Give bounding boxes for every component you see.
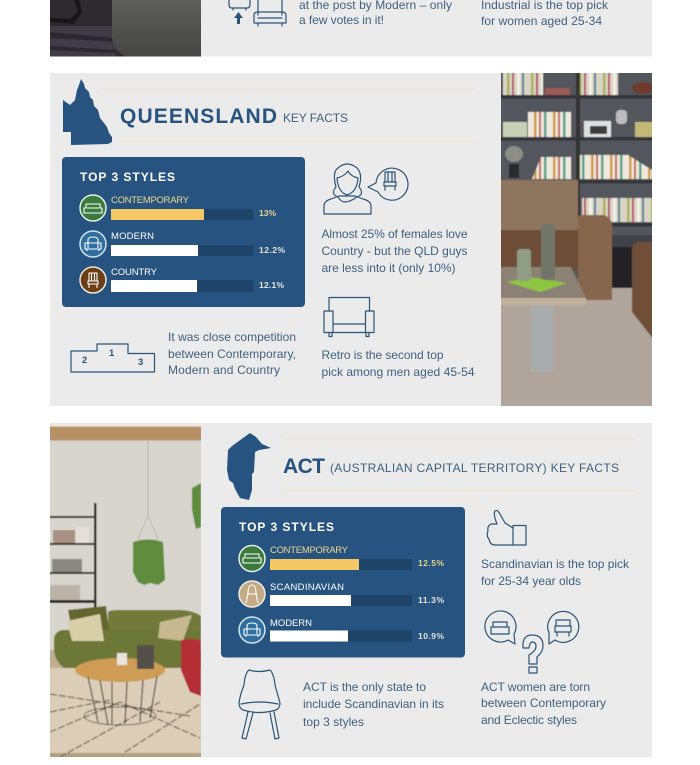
text: modern fact [299,0,452,27]
bar: Modern 10.9% [239,617,444,643]
panel: top 3 styles, Queensland: TOP 3 STYLES [80,170,175,184]
icon: Queensland map [63,79,112,145]
text: Scandinavian top pick: for 25-34 year olds [481,574,581,588]
text: close competition: Modern and Country [168,363,280,377]
text: females love Country: are less into it (only 10%) [322,261,456,275]
text: ACT women torn: ACT women are torn [481,680,590,694]
panel: Australian Capital Territory [44,417,652,763]
text: only state with Scandinavian: top 3 styles [303,715,364,729]
icon: retro armchair [324,298,374,336]
bar: Modern 10.9%: 10.9% [418,631,444,641]
text: Scandinavian top pick [481,557,630,588]
text: close competition [168,330,296,377]
icon: Scandinavian chair [239,670,280,739]
bar: Contemporary 13% [80,195,276,221]
bar: Modern 12.2% [80,231,285,257]
bar: Contemporary 12.5% [239,545,444,572]
bar: Scandinavian 11.3%: 11.3% [418,595,444,605]
bar: Contemporary 13%: 13% [259,208,276,218]
text: ACT women torn: and Eclectic styles [481,713,577,727]
panel: Queensland [50,67,658,412]
icon: ACT map [227,433,271,500]
panel: top 3 styles, ACT: TOP 3 STYLES [239,520,334,534]
icon: chairs with upward arrow [229,0,286,26]
bar: Country 12.1% [80,267,284,293]
text: industrial fact [481,0,609,28]
icon: woman with chair speech bubble [324,164,408,214]
text: only state with Scandinavian [303,680,444,729]
bar: Contemporary 12.5%: CONTEMPORARY [270,545,349,556]
text: Retro fact: Retro is the second top [322,348,444,362]
bar: Modern 12.2%: MODERN [111,231,154,242]
heading: ACT key facts [283,439,635,491]
icon: podium [71,344,154,372]
panel: top 3 styles, ACT [221,507,465,658]
text: females love Country [322,227,468,275]
photo: dark room with grey ottoman [50,0,201,56]
bar: Modern 12.2%: 12.2% [259,245,285,255]
bar: Contemporary 13%: CONTEMPORARY [111,195,190,206]
text: industrial fact: for women aged 25-34 [481,14,602,28]
text: only state with Scandinavian: include Scandinavian in its [303,697,444,711]
heading: ACT key facts: (AUSTRALIAN CAPITAL TERRITORY) KEY FACTS [330,461,619,475]
icon: podium: 1 [109,348,115,359]
photo: green sofa and hanging plant [50,426,201,757]
text: Scandinavian top pick: Scandinavian is the top pick [481,557,630,571]
text: females love Country: Country - but the QLD guys [322,244,468,258]
text: Retro fact: pick among men aged 45-54 [322,365,475,379]
bar: Scandinavian 11.3% [239,581,444,607]
text: close competition: It was close competition [168,330,296,344]
text: ACT women torn [481,680,606,727]
text: ACT women torn: between Contemporary [481,696,606,710]
text: females love Country: Almost 25% of females love [322,227,468,241]
heading: Queensland key facts: KEY FACTS [283,111,348,125]
panel: previous state (cropped) [50,0,652,56]
icon: podium: 3 [138,357,143,368]
bar: Contemporary 12.5%: 12.5% [418,558,444,568]
heading: ACT key facts: ACT [283,455,325,478]
text: only state with Scandinavian: ACT is the only state to [303,680,426,694]
photo: leather sofa and bookshelves [501,73,652,406]
bar: Scandinavian 11.3%: SCANDINAVIAN [270,582,344,593]
icon: thumbs up [487,510,526,545]
panel: top 3 styles, Queensland [62,157,305,307]
bar: Modern 10.9%: MODERN [270,618,312,629]
icon: speech bubbles and question mark [485,611,579,673]
text: Retro fact [322,348,475,379]
text: modern fact: a few votes in it! [299,13,384,27]
bar: Country 12.1%: COUNTRY [111,267,158,278]
text: close competition: between Contemporary, [168,347,296,361]
heading: Queensland key facts: QUEENSLAND [120,105,277,128]
icon: podium: 2 [82,355,87,366]
bar: Country 12.1%: 12.1% [259,280,284,290]
heading: Queensland key facts [100,89,475,142]
